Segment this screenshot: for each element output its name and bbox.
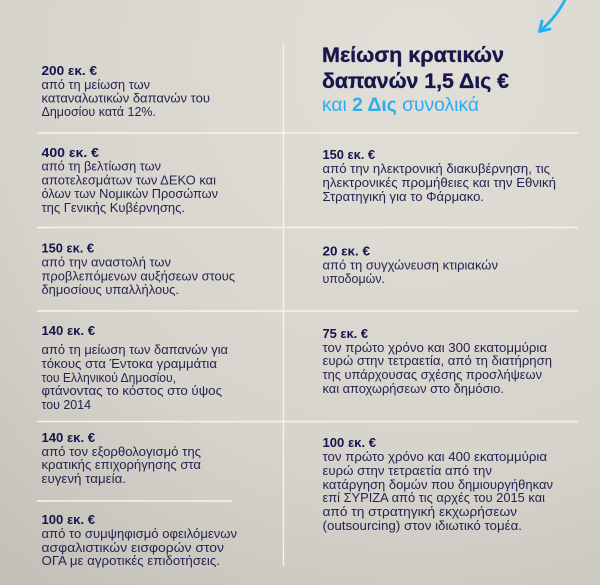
right item: 150 million: από την ηλεκτρονική διακυβέρνηση, τις bbox=[322, 162, 550, 176]
left item: 100 million bbox=[42, 513, 237, 568]
left item: 140 million funds: 140 εκ. € bbox=[42, 431, 95, 445]
left item: 400 million: 400 εκ. € bbox=[42, 146, 99, 160]
left item: 400 million bbox=[42, 146, 218, 215]
left item: 200 million: καταναλωτικών δαπανών του bbox=[42, 92, 210, 106]
left item: 140 million interest: του Ελληνικού Δημοσίου, bbox=[42, 371, 176, 385]
left item: 400 million: της Γενικής Κυβέρνησης. bbox=[42, 201, 185, 215]
right item: 100 million: 100 εκ. € bbox=[322, 436, 376, 450]
right item: 75 million: και αποχωρήσεων στο δημόσιο. bbox=[322, 382, 504, 396]
right item: 100 million: ευρώ στην τετραετία από την bbox=[322, 464, 492, 478]
left item: 140 million funds: ευγενή ταμεία. bbox=[42, 472, 126, 486]
left item: 140 million interest: από τη μείωση των δαπανών για bbox=[42, 343, 228, 357]
left item: 140 million funds bbox=[42, 431, 201, 486]
left item: 100 million: 100 εκ. € bbox=[42, 513, 95, 527]
left item: 150 million bbox=[42, 242, 235, 297]
right item: 75 million: της υπάρχουσας σχέσης προσλήψεων bbox=[322, 368, 542, 382]
right item: 20 million: υποδομών. bbox=[322, 272, 385, 286]
left item: 400 million: από τη βελτίωση των bbox=[42, 160, 161, 174]
right item: 100 million: κατάργηση δομών που δημιουργήθηκαν bbox=[322, 478, 553, 492]
left item: 200 million: από τη μείωση των bbox=[42, 78, 150, 92]
left item: 150 million: προβλεπόμενων αυξήσεων στους bbox=[42, 270, 235, 284]
right item: 20 million: από τη συγχώνευση κτιριακών bbox=[322, 258, 498, 272]
right item: 75 million bbox=[322, 327, 552, 396]
right item: 100 million bbox=[322, 436, 553, 533]
left item: 150 million: δημοσίους υπαλλήλους. bbox=[42, 283, 179, 297]
right item: 100 million: (outsourcing) στον ιδιωτικό τομέα. bbox=[322, 519, 522, 533]
left item: 100 million: ΟΓΑ με αγροτικές επιδοτήσεις. bbox=[42, 554, 220, 568]
right item: 150 million: 150 εκ. € bbox=[322, 148, 375, 162]
right item: 150 million: ηλεκτρονικές προμήθειες και την Εθνική bbox=[322, 176, 556, 190]
right item: 100 million: επί ΣΥΡΙΖΑ από τις αρχές του 2015 και bbox=[322, 491, 545, 505]
left item: 200 million bbox=[42, 64, 210, 119]
right item: 75 million: 75 εκ. € bbox=[322, 327, 368, 341]
left item: 140 million funds: από τον εξορθολογισμό της bbox=[42, 445, 201, 459]
title: Μείωση κρατικών bbox=[322, 44, 504, 67]
left item: 100 million: από το συμψηφισμό οφειλόμενων bbox=[42, 527, 237, 541]
left item: 150 million: από την αναστολή των bbox=[42, 256, 171, 270]
left item: 200 million: 200 εκ. € bbox=[42, 64, 97, 78]
right item: 75 million: ευρώ στην τετραετία, από τη διατήρηση bbox=[322, 354, 552, 368]
icon: blue arrow bbox=[540, 0, 565, 32]
left item: 400 million: όλων των Νομικών Προσώπων bbox=[42, 187, 218, 201]
left item: 140 million funds: κρατικής επιχορήγησης στα bbox=[42, 458, 201, 472]
left item: 140 million interest bbox=[42, 324, 228, 412]
left item: 140 million interest: του 2014 bbox=[42, 398, 91, 412]
left item: 150 million: 150 εκ. € bbox=[42, 242, 94, 256]
right item: 150 million: Στρατηγική για το Φάρμακο. bbox=[322, 190, 484, 204]
left item: 140 million interest: 140 εκ. € bbox=[42, 324, 95, 338]
left item: 140 million interest: φτάνοντας το κόστος στο ύψος bbox=[42, 384, 222, 398]
right item: 75 million: τον πρώτο χρόνο και 300 εκατομμύρια bbox=[322, 341, 547, 355]
right item: 20 million bbox=[322, 244, 498, 286]
right item: 100 million: τον πρώτο χρόνο και 400 εκατομμύρια bbox=[322, 450, 547, 464]
left item: 100 million: ασφαλιστικών εισφορών στον bbox=[42, 541, 224, 555]
left item: 200 million: Δημοσίου κατά 12%. bbox=[42, 105, 156, 119]
title: και 2 Δις συνολικά bbox=[322, 95, 479, 116]
title bbox=[322, 44, 509, 116]
right item: 100 million: από τη στρατηγική εκχωρήσεων bbox=[322, 505, 517, 519]
left item: 400 million: αποτελεσμάτων των ΔΕΚΟ και bbox=[42, 174, 216, 188]
title: δαπανών 1,5 Δις € bbox=[322, 70, 509, 93]
left item: 140 million interest: τόκους στα Έντοκα γραμμάτια bbox=[42, 357, 217, 371]
right item: 150 million bbox=[322, 148, 556, 204]
right item: 20 million: 20 εκ. € bbox=[322, 244, 370, 258]
